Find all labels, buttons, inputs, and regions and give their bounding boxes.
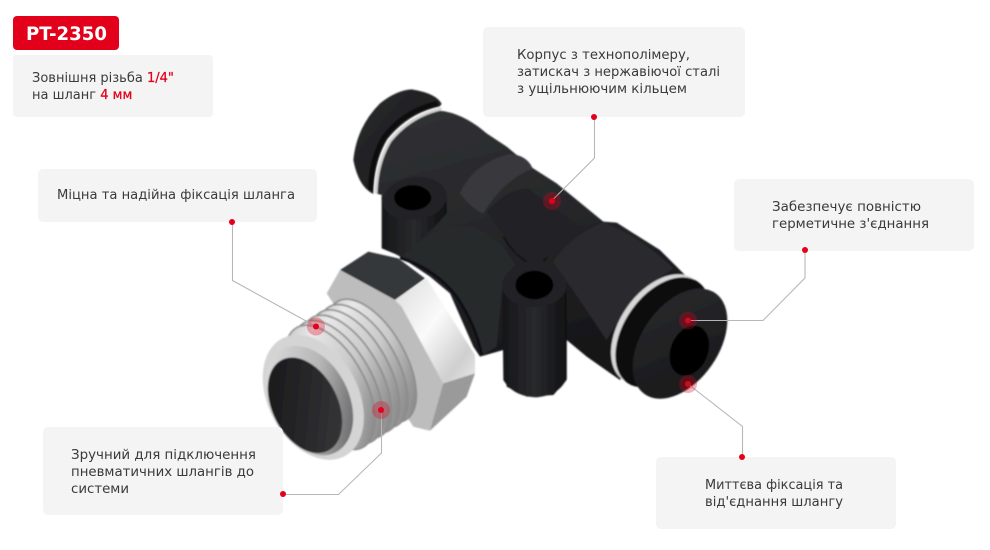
panel: pneumatic connection: системи	[71, 482, 129, 497]
panel: pneumatic connection: Зручний для підключення	[71, 448, 256, 463]
badge: model number: PT-2350	[26, 23, 107, 45]
upper-left port: silver ring and cap	[353, 89, 442, 194]
fitting body: black polymer tee	[353, 89, 747, 416]
threaded metal end	[242, 252, 475, 477]
panel: hermetic connection: герметичне з'єднання	[772, 217, 929, 232]
panel: instant fixation: від'єднання шлангу	[705, 495, 843, 510]
panel: secure hose fixation	[38, 169, 317, 222]
panel: instant fixation	[656, 457, 896, 529]
panel: pneumatic connection: пневматичних шлангів до	[71, 465, 254, 480]
badge: model number	[13, 16, 119, 50]
panel: hermetic connection: Забезпечує повністю	[772, 200, 921, 215]
upper side port	[380, 173, 450, 257]
panel: secure hose fixation: Міцна та надійна фіксація шланга	[57, 188, 295, 203]
lower side port	[502, 263, 567, 397]
panel: pneumatic connection	[43, 427, 283, 515]
panel: hermetic connection	[734, 179, 974, 251]
leader lines	[232, 117, 805, 494]
panel: body materials: з ущільнюючим кільцем	[517, 82, 687, 97]
callout markers	[229, 114, 808, 497]
panel: thread and hose size: Зовнішня різьба 1/4"	[32, 71, 174, 86]
panel: body materials: затискач з нержавіючої сталі	[517, 65, 720, 80]
lower-right port: silver ring and cap	[592, 257, 747, 416]
panel: body materials	[483, 27, 745, 117]
hex nut	[327, 252, 475, 431]
panel: thread and hose size	[13, 55, 213, 117]
panel: thread and hose size: на шланг 4 мм	[32, 88, 132, 103]
mouth of the thread	[242, 317, 384, 477]
product photo: T-shaped push-in fitting	[242, 89, 747, 477]
thread rings	[266, 285, 435, 464]
panel: body materials: Корпус з технополімеру,	[517, 48, 690, 63]
panel: instant fixation: Миттєва фіксація та	[705, 478, 843, 493]
